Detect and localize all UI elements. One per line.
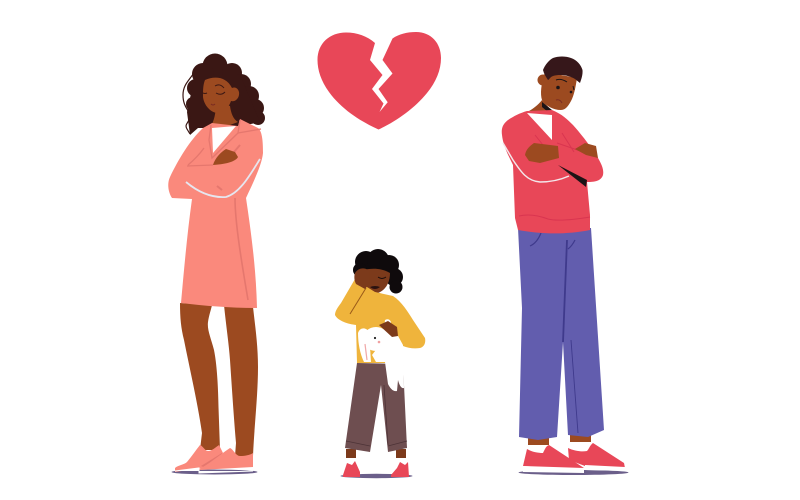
child trousers	[345, 363, 407, 452]
child sweater	[335, 279, 425, 363]
man shadow	[518, 470, 628, 475]
bunny inner ear	[365, 344, 367, 360]
child arm crease	[350, 288, 366, 314]
child mouth	[370, 286, 380, 289]
woman sleeve highlight	[186, 159, 260, 197]
man ankles	[528, 435, 591, 445]
man left shoe	[523, 445, 584, 473]
bunny eye	[374, 337, 376, 339]
woman dress	[168, 119, 263, 308]
man sweater	[502, 110, 603, 233]
man right shoe	[568, 443, 625, 471]
man trousers	[518, 228, 604, 440]
man facial features	[556, 79, 574, 103]
man white shirt	[527, 113, 552, 140]
man collar shadow	[542, 102, 552, 112]
child legs	[346, 449, 406, 459]
child trouser details	[346, 385, 407, 446]
bunny head	[363, 327, 389, 351]
child hair	[353, 249, 403, 294]
man sweater seams	[519, 133, 592, 220]
woman face	[203, 78, 239, 113]
woman hand	[213, 149, 238, 165]
woman legs	[180, 303, 258, 456]
woman neck	[212, 102, 238, 128]
man sleeve highlight	[503, 143, 569, 182]
child face	[362, 269, 390, 293]
bunny toy	[358, 319, 404, 391]
woman white shirt	[212, 126, 236, 153]
bunny body	[372, 319, 404, 391]
child shoes	[343, 461, 409, 477]
woman facial features	[203, 85, 225, 105]
bunny nose	[378, 341, 380, 343]
woman shoes	[175, 445, 253, 473]
woman dress details	[187, 120, 261, 300]
man neck	[527, 100, 553, 117]
figure: man	[502, 56, 628, 475]
child shadow	[340, 474, 412, 478]
trouser creases	[530, 233, 578, 433]
woman shadow	[172, 470, 258, 474]
man hair	[543, 56, 583, 83]
figure: woman	[168, 54, 265, 474]
child eye	[378, 277, 386, 278]
child hand on bunny	[379, 321, 398, 337]
man black undershirt	[558, 165, 587, 187]
man ear	[538, 74, 548, 86]
bunny ears	[358, 328, 371, 362]
child hand at eye	[354, 268, 370, 289]
woman hair	[183, 54, 265, 135]
man hands	[525, 143, 598, 163]
icon: broken heart	[318, 32, 441, 130]
child socks	[346, 458, 406, 464]
figure: child	[335, 249, 425, 478]
man face	[541, 72, 577, 110]
